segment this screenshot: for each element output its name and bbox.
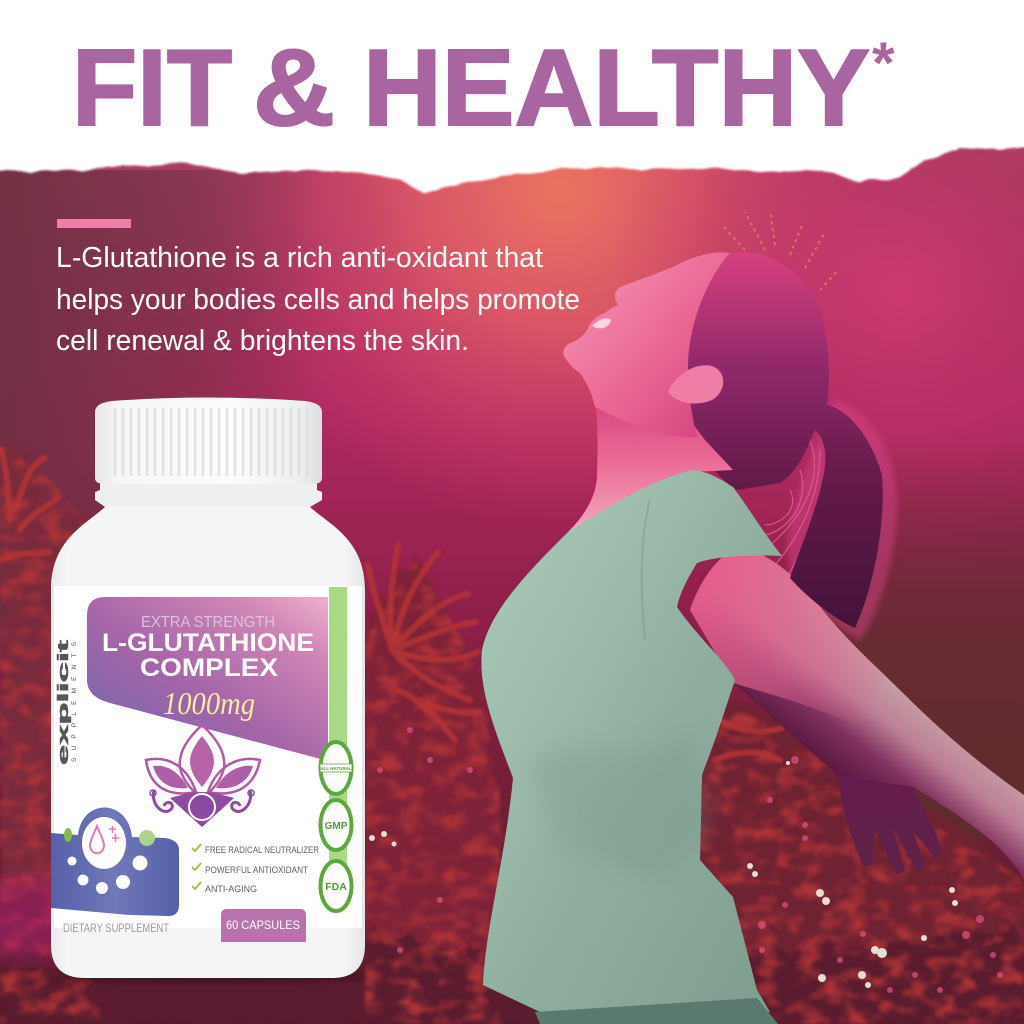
bottle shadow [48, 969, 368, 983]
right petal [208, 759, 260, 793]
benefit list [192, 844, 319, 895]
accent bar [57, 219, 131, 228]
lotus emblem [146, 725, 260, 827]
description text [56, 242, 580, 357]
capsule count tag [221, 909, 306, 942]
hand [838, 775, 943, 875]
arm [690, 548, 1024, 880]
arm pink overlay [690, 548, 885, 725]
green strip [329, 587, 347, 877]
benefit list: FREE RADICAL NEUTRALIZER [205, 845, 319, 856]
face [563, 252, 730, 437]
center petal [180, 725, 224, 799]
FDA badge: FDA [325, 881, 347, 893]
title [72, 27, 870, 149]
title: & [253, 27, 335, 149]
supplement bottle [48, 398, 368, 983]
brand logo: SUPPLEMENTS [71, 641, 78, 762]
GMP badge: GMP [325, 821, 348, 832]
background: flowers and petals [369, 727, 1003, 993]
benefit list: POWERFUL ANTIOXIDANT [205, 865, 308, 876]
base [170, 792, 234, 827]
neck [568, 400, 733, 532]
product text: L-GLUTATHIONE [102, 629, 314, 657]
bottle body [51, 507, 365, 978]
brand logo: explicit [55, 640, 72, 765]
capsule count tag: 60 CAPSULES [226, 920, 300, 932]
all natural badge [320, 742, 352, 794]
all natural badge: ALL NATURAL [320, 766, 352, 771]
brand logo [55, 640, 78, 765]
background: flowering shrubs [0, 445, 1024, 1024]
jeans [535, 998, 778, 1024]
purple banner [87, 597, 328, 761]
GMP badge [320, 800, 352, 850]
shrub crown leaves [0, 450, 782, 760]
shirt shadow [530, 720, 712, 880]
ponytail glow [787, 400, 897, 640]
blue panel droplet and dots [64, 817, 155, 894]
title: HEALTHY [363, 27, 870, 149]
blue panel [51, 807, 179, 916]
product text: COMPLEX [140, 654, 278, 682]
flyaway hair above head [722, 210, 838, 290]
description text: L-Glutathione is a rich anti-oxidant that [56, 242, 543, 274]
description text: helps your bodies cells and helps promote [56, 284, 580, 316]
product text: EXTRA STRENGTH [141, 614, 275, 631]
product text: 1000mg [163, 685, 255, 721]
label area [51, 586, 362, 928]
bottle neck [95, 482, 322, 507]
FDA badge [320, 861, 352, 911]
sleeve seam shadow [642, 500, 650, 640]
hair [688, 252, 883, 628]
left petal [146, 759, 196, 793]
mouth [592, 318, 611, 328]
side scrolls [153, 790, 251, 812]
asterisk: * [872, 31, 895, 96]
title: FIT [72, 27, 232, 149]
quality badges [320, 742, 352, 911]
benefit list: ANTI-AGING [205, 884, 257, 895]
bottle cap [95, 398, 322, 484]
description text: cell renewal & brightens the skin. [56, 325, 469, 357]
ear [668, 365, 723, 404]
torn white header [0, 0, 1024, 194]
woman [481, 210, 1024, 1024]
shirt [481, 470, 782, 1020]
dietary supplement label: DIETARY SUPPLEMENT [63, 921, 170, 935]
magenta haze lower left [0, 880, 110, 960]
product text [102, 614, 314, 721]
hair strands in gap [765, 440, 828, 580]
